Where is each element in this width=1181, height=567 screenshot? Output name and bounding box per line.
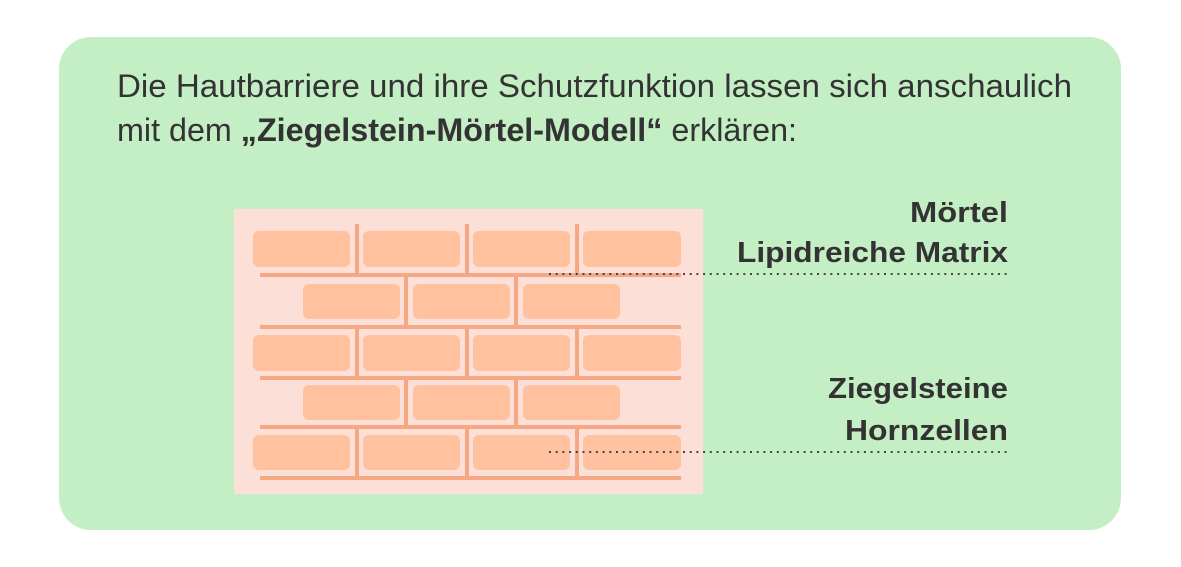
panel: green card [59, 37, 1121, 530]
callout: Mörtel label: Lipidreiche Matrix [737, 237, 1008, 269]
chart: brick wall illustration [234, 209, 703, 494]
title text: Die Hautbarriere und ihre Schutzfunktion lassen sich anschaulich [117, 68, 1072, 104]
callout: Mörtel label: Mörtel [910, 197, 1008, 229]
callout: Mörtel label [549, 197, 1010, 274]
callout: Ziegelsteine label: Hornzellen [845, 415, 1008, 447]
callout: Ziegelsteine label [549, 373, 1010, 452]
title text: mit dem „Ziegelstein-Mörtel-Modell“ erklären: [117, 112, 797, 148]
callout: Ziegelsteine label: Ziegelsteine [828, 373, 1008, 405]
title text [117, 68, 1072, 148]
